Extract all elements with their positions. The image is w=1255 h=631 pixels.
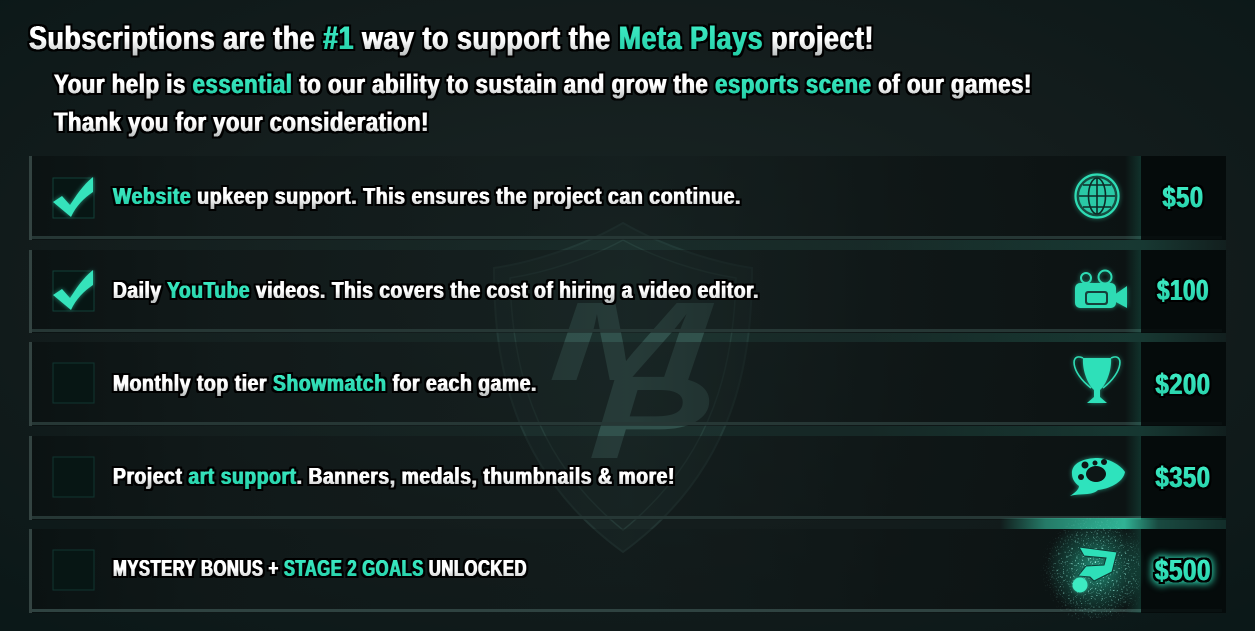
panel: goal 5 mystery bonus [29, 516, 1226, 620]
price: $50 [1162, 182, 1204, 214]
icon: globe [1076, 174, 1118, 218]
icon: video camera [1075, 270, 1127, 308]
price: $200 [1156, 369, 1210, 401]
icon: paint palette [1070, 458, 1125, 496]
band glow between goal rows [29, 240, 1226, 436]
panel: goal 3 showmatch [29, 342, 1226, 426]
goal text: Website upkeep support. This ensures the project can continue. [113, 183, 741, 209]
intro line: Your help is essential to our ability to sustain and grow the esports scene of our games! [54, 69, 1032, 99]
goal text: MYSTERY BONUS + STAGE 2 GOALS UNLOCKED [113, 555, 527, 581]
icon: trophy [1074, 357, 1120, 403]
icon: glowing question mark [1040, 516, 1146, 620]
checkbox checked [53, 177, 94, 218]
panel: goal 1 website [29, 156, 1226, 240]
watermark: Meta Plays shield logo: P [588, 352, 710, 484]
price: $350 [1156, 462, 1210, 494]
watermark: Meta Plays shield logo: M [548, 279, 715, 404]
checkbox empty [53, 550, 94, 590]
glow band above mystery row [1000, 518, 1226, 529]
panel: goal 4 art support [29, 436, 1226, 520]
checkbox empty [53, 363, 94, 403]
checkbox checked [53, 270, 94, 311]
panel: goal 2 youtube [29, 250, 1226, 333]
goal text: Monthly top tier Showmatch for each game. [113, 370, 537, 396]
price: $100 [1157, 275, 1209, 307]
goal text: Project art support. Banners, medals, thumbnails & more! [113, 463, 675, 489]
title: Subscriptions are the #1 way to support the Meta Plays project! [29, 20, 874, 56]
watermark: Meta Plays shield logo [494, 223, 752, 552]
checkbox empty [53, 457, 94, 497]
goal text: Daily YouTube videos. This covers the cost of hiring a video editor. [113, 277, 759, 303]
thank you line: Thank you for your consideration! [54, 107, 429, 137]
price: $500 [1155, 555, 1211, 587]
